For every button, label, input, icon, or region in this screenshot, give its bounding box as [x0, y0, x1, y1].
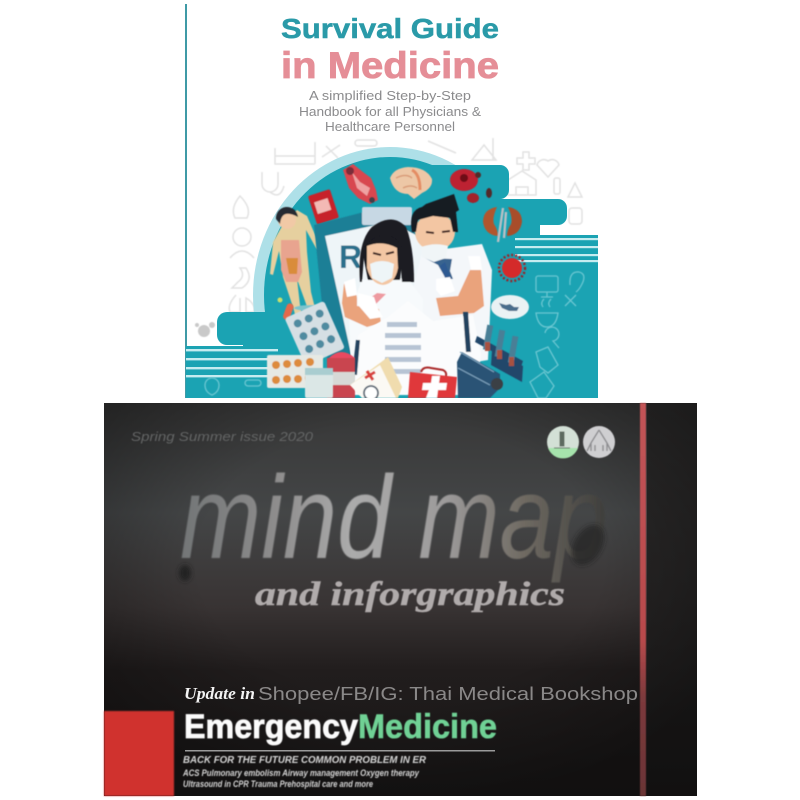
icon: heart	[343, 164, 378, 204]
badge: grey logo	[583, 426, 615, 458]
small topic text: ACS Pulmonary embolism Airway management Oxygen therapy	[182, 768, 420, 778]
right dark band	[647, 403, 697, 796]
title: Survival Guide: Survival Guide	[281, 13, 499, 44]
icon: report papers with magnifier	[350, 357, 402, 400]
illustration: human anatomy figure	[269, 206, 318, 314]
illustration: prescription clipboard	[314, 206, 423, 358]
small topic text: BACK FOR THE FUTURE COMMON PROBLEM IN ER	[183, 755, 427, 766]
icon: clear jar	[305, 368, 333, 398]
title: in Medicine: in Medicine	[281, 45, 499, 86]
icon: petri dish	[491, 295, 529, 319]
icon: small grey germs	[195, 322, 215, 337]
script subtitle: and inforgraphics: and inforgraphics	[255, 576, 565, 613]
outline icons on teal	[205, 272, 584, 398]
white side stripes	[186, 238, 598, 377]
icon: blood bag	[308, 189, 339, 225]
icon: test tube rack	[475, 325, 523, 382]
vignette shading	[104, 403, 697, 796]
badge: green logo	[547, 426, 579, 458]
update line: Update in	[184, 684, 255, 703]
heading: Emergency Medicine	[184, 708, 497, 746]
update line	[184, 684, 638, 704]
icon: doctor bag	[457, 352, 503, 398]
icon: orange tablet packs	[267, 355, 323, 388]
red vertical line	[640, 403, 646, 796]
red square	[104, 711, 174, 796]
cover spine line	[185, 4, 187, 398]
icon: first aid kit	[408, 368, 457, 398]
update line: Shopee/FB/IG: Thai Medical Bookshop	[258, 684, 638, 704]
teal background blob with stripes	[186, 147, 598, 398]
icon: red medicine bottle	[327, 352, 355, 398]
issue caption: Spring Summer issue 2020	[131, 429, 314, 444]
faint outline medical icons on white	[229, 138, 582, 312]
underline rule	[185, 750, 495, 752]
script title: mind map: mind map	[180, 452, 608, 584]
icon: kidneys	[483, 207, 522, 242]
illustration: striped paper and coats	[353, 311, 481, 396]
panel: book cover Survival Guide in Medicine	[185, 4, 598, 398]
dark cover background	[104, 403, 697, 796]
subtitle text: Handbook for all Physicians &	[299, 105, 482, 119]
smudges on the script title	[179, 519, 611, 581]
icon: pill blister	[284, 301, 345, 359]
icon: virus	[499, 255, 525, 281]
subtitle text	[300, 90, 481, 131]
heading: Emergency Medicine: Emergency	[184, 708, 358, 746]
small topic text: Ultrasound in CPR Trauma Prehospital care and more	[183, 779, 373, 789]
panel: dark journal cover Mind map and inforgraphics	[104, 403, 697, 796]
prescription R mark: R	[339, 239, 362, 275]
heading: Emergency Medicine: Medicine	[358, 708, 497, 746]
icon: brain	[390, 167, 432, 199]
illustration: female doctor	[342, 218, 415, 356]
icon: capsule	[278, 298, 294, 321]
subtitle text: A simplified Step-by-Step	[309, 89, 471, 103]
subtitle text: Healthcare Personnel	[325, 120, 455, 134]
icon: red blood cells	[450, 169, 492, 203]
illustration: male doctor	[408, 194, 492, 370]
small topic text	[182, 755, 427, 789]
